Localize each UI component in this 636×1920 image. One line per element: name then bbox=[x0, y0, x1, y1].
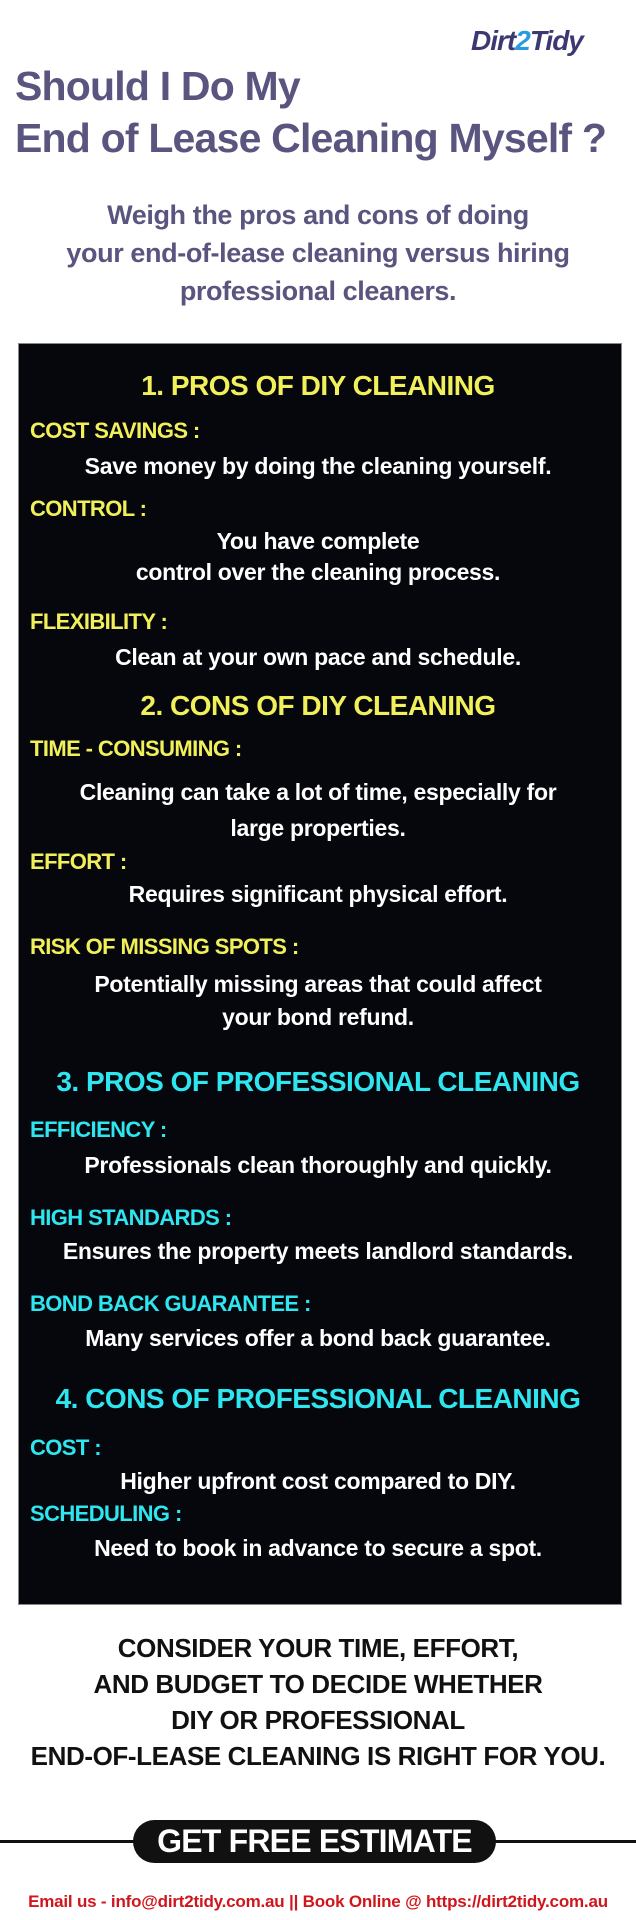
title bbox=[15, 63, 606, 161]
text: flexibility: Clean at your own pace and schedule. bbox=[115, 644, 521, 670]
label: risk of missing spots: RISK OF MISSING SPOTS : bbox=[30, 934, 299, 959]
title: Should I Do My bbox=[15, 63, 300, 109]
label: time consuming: TIME - CONSUMING : bbox=[30, 736, 242, 761]
subtitle: Weigh the pros and cons of doing bbox=[107, 200, 529, 230]
conclusion: AND BUDGET TO DECIDE WHETHER bbox=[93, 1669, 543, 1699]
panel: pros and cons bbox=[18, 343, 622, 1605]
conclusion bbox=[31, 1633, 605, 1771]
subtitle bbox=[66, 200, 570, 306]
text: high standards: Ensures the property meets landlord standards. bbox=[63, 1238, 573, 1264]
title: End of Lease Cleaning Myself ? bbox=[15, 115, 606, 161]
label: control: CONTROL : bbox=[30, 496, 146, 521]
label: cost savings: COST SAVINGS : bbox=[30, 418, 200, 443]
text: cost savings: Save money by doing the cleaning yourself. bbox=[85, 453, 551, 479]
subtitle: professional cleaners. bbox=[180, 276, 456, 306]
heading: cons of DIY: 2. CONS OF DIY CLEANING bbox=[140, 690, 496, 721]
text: effort: Requires significant physical effort. bbox=[129, 881, 507, 907]
label: efficiency: EFFICIENCY : bbox=[30, 1117, 167, 1142]
text: time consuming bbox=[80, 779, 556, 841]
text: efficiency: Professionals clean thoroughly and quickly. bbox=[84, 1152, 552, 1178]
text: risk: Potentially missing areas that could affect bbox=[94, 971, 542, 997]
text: risk bbox=[94, 971, 542, 1030]
text: control: control over the cleaning process. bbox=[136, 559, 500, 585]
conclusion: DIY OR PROFESSIONAL bbox=[171, 1705, 465, 1735]
divider line bbox=[0, 1840, 636, 1843]
text: scheduling: Need to book in advance to secure a spot. bbox=[94, 1535, 542, 1561]
label: cost: COST : bbox=[30, 1435, 101, 1460]
label: flexibility: FLEXIBILITY : bbox=[30, 609, 167, 634]
label: effort: EFFORT : bbox=[30, 849, 127, 874]
heading: pros of professional: 3. PROS OF PROFESSIONAL CLEANING bbox=[56, 1066, 580, 1097]
heading: cons of professional: 4. CONS OF PROFESSIONAL CLEANING bbox=[56, 1383, 580, 1414]
conclusion: CONSIDER YOUR TIME, EFFORT, bbox=[118, 1633, 518, 1663]
button: get free estimate: GET FREE ESTIMATE bbox=[157, 1823, 472, 1859]
text: bond back: Many services offer a bond back guarantee. bbox=[85, 1325, 551, 1351]
conclusion: END-OF-LEASE CLEANING IS RIGHT FOR YOU. bbox=[31, 1741, 605, 1771]
text: time consuming: Cleaning can take a lot of time, especially for bbox=[80, 779, 556, 805]
text: control: You have complete bbox=[217, 528, 419, 554]
label: scheduling: SCHEDULING : bbox=[30, 1501, 182, 1526]
text: control bbox=[136, 528, 500, 585]
subtitle: your end-of-lease cleaning versus hiring bbox=[66, 238, 570, 268]
label: high standards: HIGH STANDARDS : bbox=[30, 1205, 231, 1230]
heading: pros of DIY: 1. PROS OF DIY CLEANING bbox=[141, 370, 495, 401]
label: bond back guarantee: BOND BACK GUARANTEE : bbox=[30, 1291, 311, 1316]
text: risk: your bond refund. bbox=[222, 1004, 414, 1030]
footer contact: Email us - info@dirt2tidy.com.au || Book Online @ https://dirt2tidy.com.au bbox=[28, 1892, 608, 1911]
text: time consuming: large properties. bbox=[230, 815, 406, 841]
logo: Dirt2Tidy bbox=[471, 25, 583, 56]
text: cost: Higher upfront cost compared to DIY. bbox=[120, 1468, 516, 1494]
